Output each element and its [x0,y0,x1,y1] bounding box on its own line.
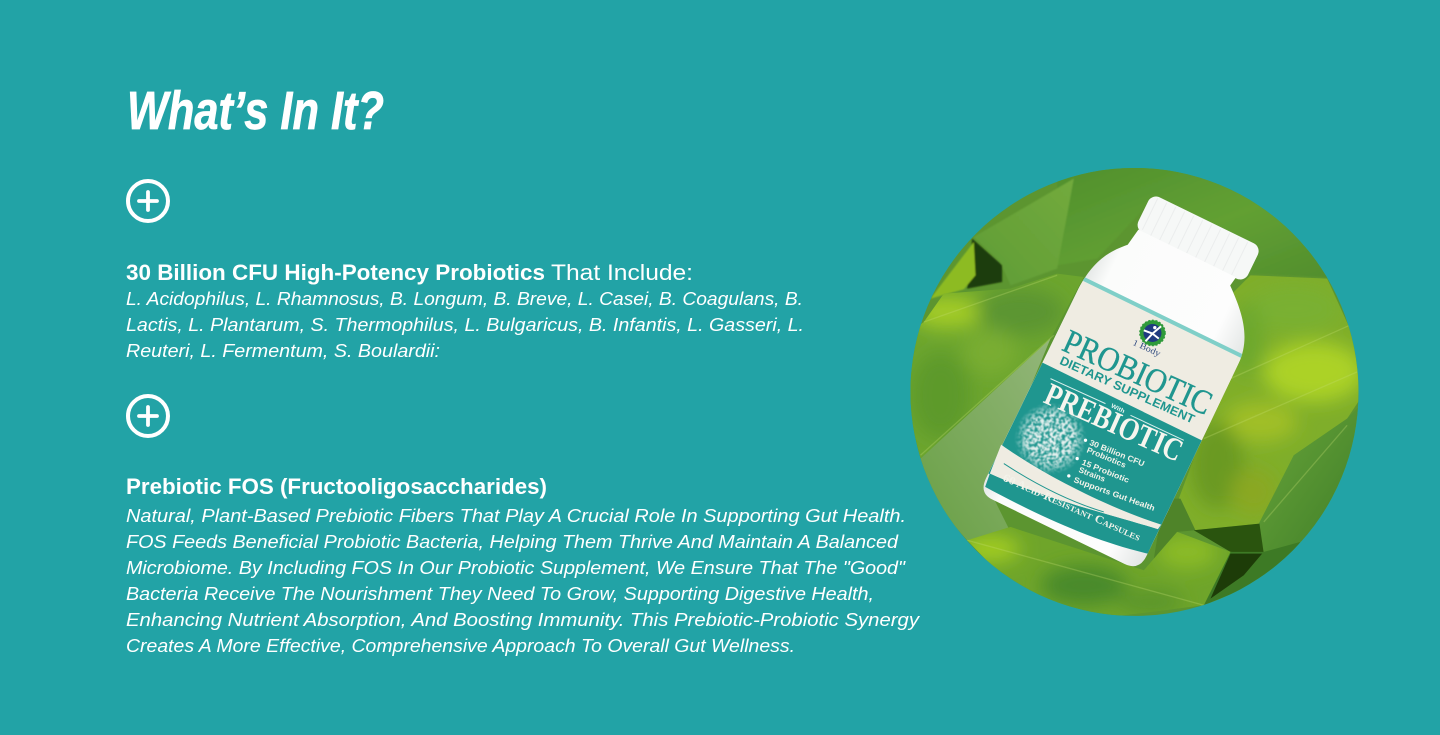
right leaf [1179,276,1358,530]
strain list: Lactis, L. Plantarum, S. Thermophilus, L. Bulgaricus, B. Infantis, L. Gasseri, L. [126,315,804,335]
text block: prebiotic [126,474,920,656]
icon: plus circle, probiotics [128,181,168,221]
label text: DIETARY SUPPLEMENT [1058,354,1197,427]
prebiotic description: FOS Feeds Beneficial Probiotic Bacteria, Helping Them Thrive And Maintain A Balanced [126,532,899,552]
heading: probiotics: 30 Billion CFU High-Potency Probiotics [126,260,545,285]
strain list: L. Acidophilus, L. Rhamnosus, B. Longum, B. Breve, L. Casei, B. Coagulans, B. [126,289,803,309]
logo: 1 Body [1131,337,1163,359]
logo [1131,320,1165,359]
cream swoosh [990,445,1161,529]
heading: probiotics: That Include: [551,260,693,285]
leaves [910,165,1364,619]
prebiotic description: Enhancing Nutrient Absorption, And Boosting Immunity. This Prebiotic-Probiotic Synergy [126,610,920,630]
prebiotic description [126,506,920,656]
product photo: bottle on leaves [910,165,1364,619]
cap and body [984,196,1259,566]
label text: PREBIOTIC [1039,375,1189,468]
label text: 15 Probiotic [1080,458,1131,485]
label divider lines [1050,379,1184,440]
text block: probiotics [126,260,804,361]
label text: 30 Billion CFU [1088,438,1146,469]
label text: Supports Gut Health [1072,475,1156,513]
bottle [984,196,1259,566]
label text: Probiotics [1085,445,1128,470]
prebiotic description: Bacteria Receive The Nourishment They Need To Grow, Supporting Digestive Health, [126,584,874,604]
label text: PROBIOTIC [1057,323,1218,423]
label text [1001,323,1218,544]
strain list [126,289,804,361]
title: What’s In It? [127,81,384,141]
prebiotic powder [1014,403,1086,475]
heading: prebiotic: Prebiotic FOS (Fructooligosaccharides) [126,474,547,499]
label text: With [1110,403,1126,415]
prebiotic description: Creates A More Effective, Comprehensive Approach To Overall Gut Wellness. [126,636,795,656]
prebiotic description: Microbiome. By Including FOS In Our Probiotic Supplement, We Ensure That The "Good" [126,558,907,578]
label text: 60 Acid-Resistant Capsules [1001,472,1143,544]
icon: plus circle, prebiotic [128,396,168,436]
strain list: Reuteri, L. Fermentum, S. Boulardii: [126,341,440,361]
left leaf [910,274,1084,458]
prebiotic description: Natural, Plant-Based Prebiotic Fibers That Play A Crucial Role In Supporting Gut Health. [126,506,906,526]
label text: Strains [1077,465,1107,484]
lower teal band [985,474,1158,554]
